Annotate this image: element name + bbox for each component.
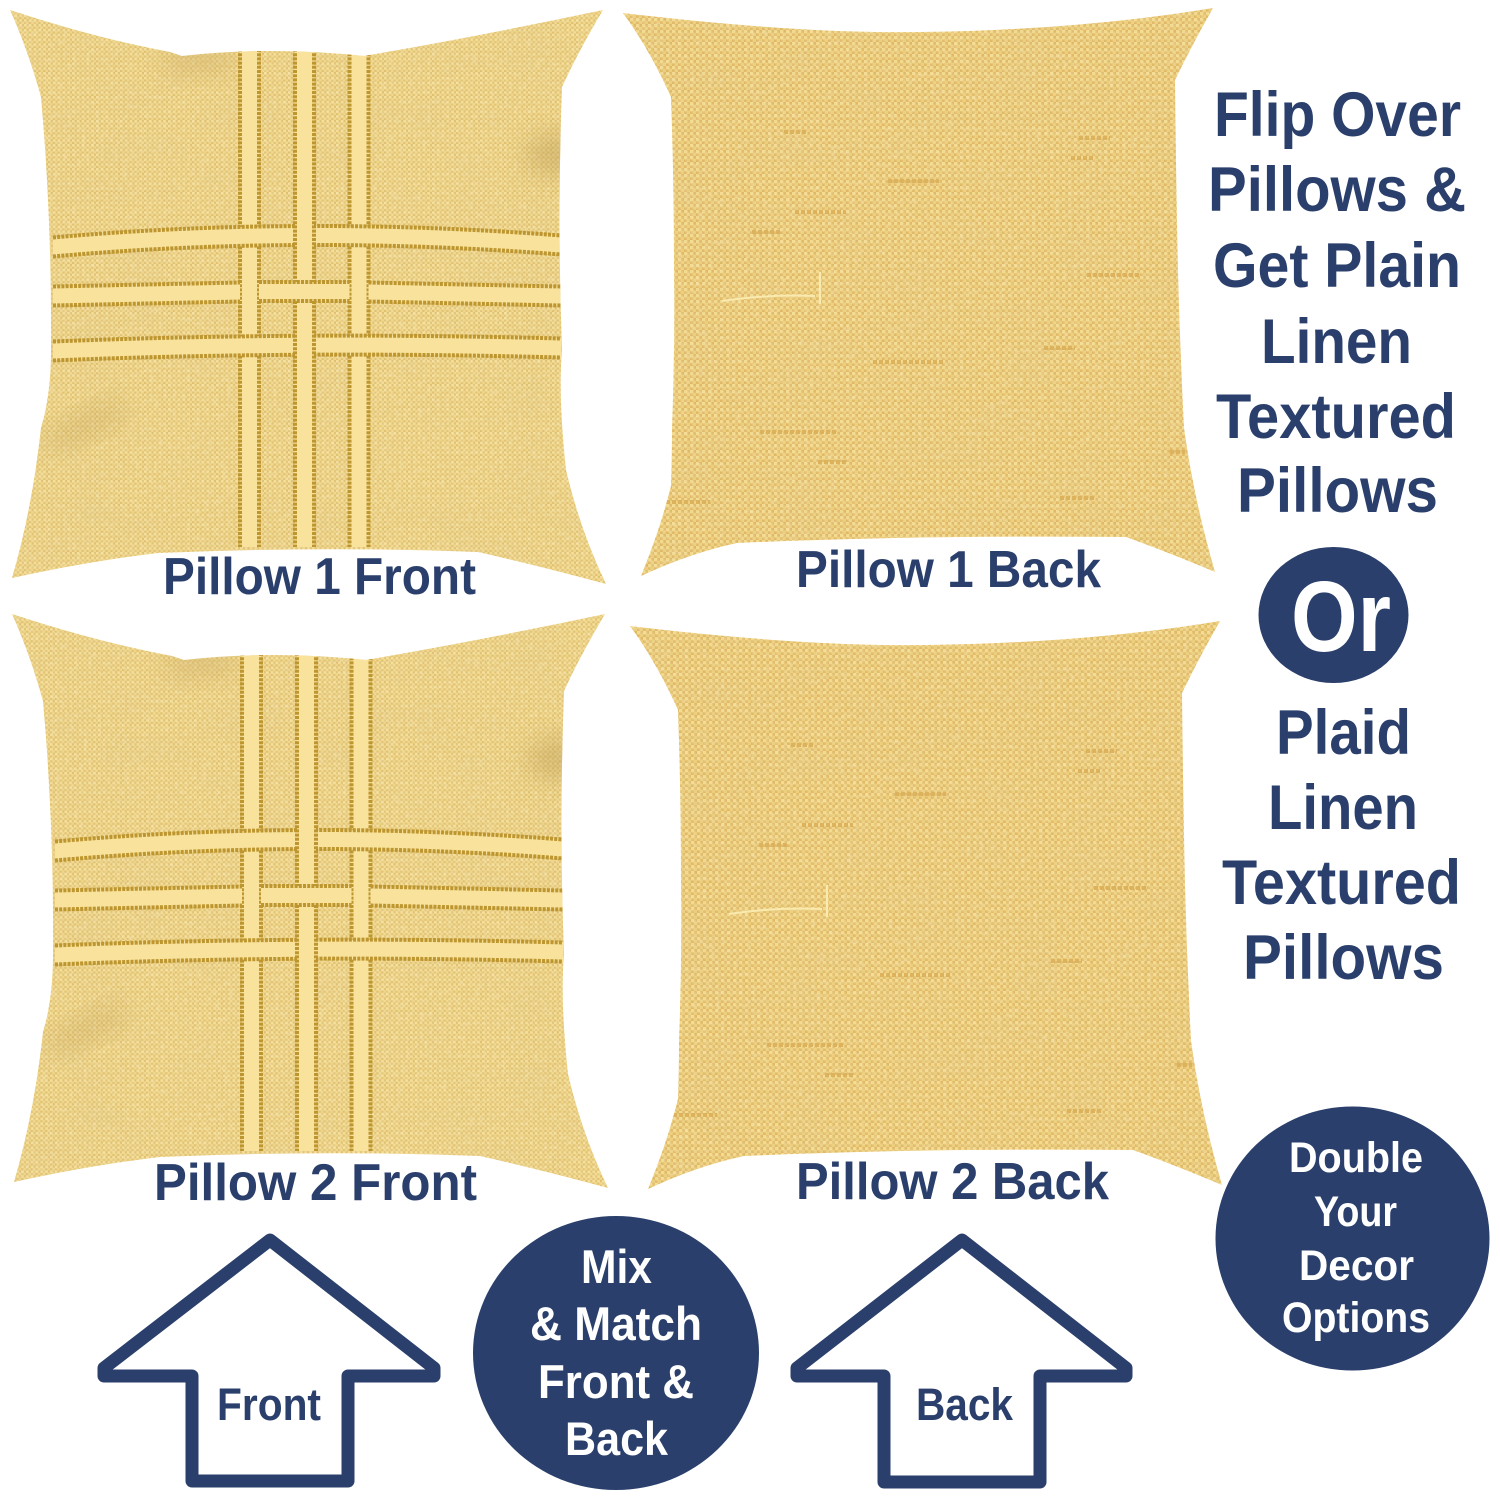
badge: double your decor options: Decor	[1299, 1242, 1414, 1290]
heading: flip over to plain linen: Get Plain	[1213, 231, 1461, 301]
pillow 2 front	[2, 604, 622, 1212]
badge: or	[1258, 547, 1408, 683]
heading: flip over to plain linen: Linen	[1261, 307, 1412, 377]
pillow 1 front	[0, 0, 620, 606]
heading: plaid linen: Plaid	[1276, 698, 1411, 768]
pillow 2 back	[627, 613, 1237, 1213]
heading: plaid linen: Textured	[1222, 848, 1461, 918]
badge: mix and match: & Match	[530, 1297, 702, 1350]
arrow: front: Front	[217, 1379, 321, 1430]
badge: double your decor options: Your	[1314, 1188, 1397, 1236]
badge: or: Or	[1291, 561, 1391, 673]
heading: flip over to plain linen: Textured	[1216, 382, 1456, 452]
badge: double your decor options: Options	[1282, 1294, 1430, 1342]
label: pillow 1 back: Pillow 1 Back	[796, 541, 1101, 599]
arrow: front	[104, 1240, 434, 1481]
label: pillow 2 front: Pillow 2 Front	[154, 1154, 477, 1212]
badge: double your decor options: Double	[1289, 1134, 1423, 1182]
heading: plaid linen: Pillows	[1243, 923, 1444, 993]
badge: mix and match: Front &	[538, 1355, 694, 1408]
label: pillow 1 front: Pillow 1 Front	[163, 548, 476, 606]
heading: flip over to plain linen	[1208, 80, 1466, 526]
arrow: back: Back	[916, 1379, 1014, 1430]
heading: plaid linen	[1222, 698, 1461, 993]
label: pillow 2 back: Pillow 2 Back	[796, 1153, 1109, 1211]
heading: flip over to plain linen: Flip Over	[1214, 80, 1461, 150]
arrow: back	[797, 1240, 1126, 1482]
badge: double your decor options	[1216, 1106, 1490, 1370]
badge: mix and match: Mix	[581, 1240, 652, 1293]
heading: flip over to plain linen: Pillows &	[1208, 155, 1466, 225]
badge: mix and match	[473, 1216, 759, 1490]
badge: mix and match: Back	[565, 1412, 669, 1465]
heading: flip over to plain linen: Pillows	[1237, 456, 1438, 526]
heading: plaid linen: Linen	[1268, 773, 1418, 843]
pillow 1 back	[620, 0, 1230, 600]
